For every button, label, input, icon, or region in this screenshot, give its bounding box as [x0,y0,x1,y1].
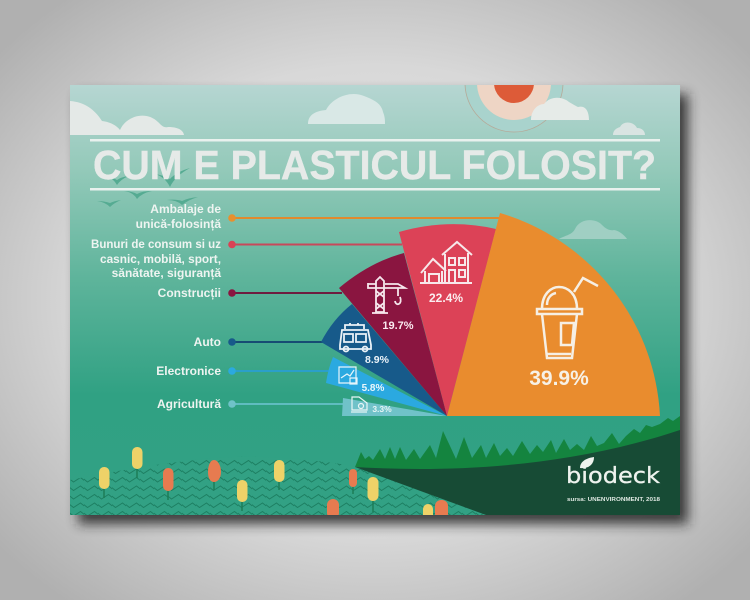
trees [99,447,448,520]
value: auto: 8.9% [365,354,390,366]
category labels: Construcții [158,286,221,300]
logo: biodeck [566,464,660,489]
icon: electronics [339,367,357,384]
value: agriculture: 3.3% [372,404,392,414]
segment: agriculture [342,398,447,416]
dark ground [355,430,680,515]
segment: auto [321,304,447,416]
icon: agriculture [351,397,367,412]
segment: consumer goods [399,224,496,416]
category labels: Bunuri de consum si uz [91,237,221,251]
category labels: unică-folosință [136,217,221,231]
category labels: Ambalaje de [150,202,221,216]
value: packaging: 39.9% [529,367,589,390]
value: consumer goods: 22.4% [429,291,463,305]
leader lines [228,214,502,408]
segment: construction [339,253,447,416]
poster card [70,85,680,515]
category labels: casnic, mobilă, sport, [100,252,221,266]
segment: electronics [326,357,447,416]
category labels [91,202,221,411]
category labels: sănătate, siguranță [112,266,221,280]
hill with zigzag pattern [70,457,486,515]
icon: cup [537,278,598,358]
icon: crane [368,277,405,313]
fan chart [321,213,660,416]
category labels: Auto [194,335,221,349]
logo [568,457,660,484]
icon: house [420,242,472,283]
forest [355,416,680,472]
segment: packaging [447,213,660,416]
value: construction: 19.7% [382,320,414,332]
birds [97,168,198,207]
category labels: Agricultură [157,397,221,411]
clouds [70,94,645,239]
source: sursa: UNENVIRONMENT, 2018 [567,497,660,503]
value: electronics: 5.8% [362,383,385,394]
icon: sun [464,85,564,132]
title: CUM E PLASTICUL FOLOSIT? [93,142,656,188]
category labels: Electronice [156,364,221,378]
icon: van [340,323,371,352]
